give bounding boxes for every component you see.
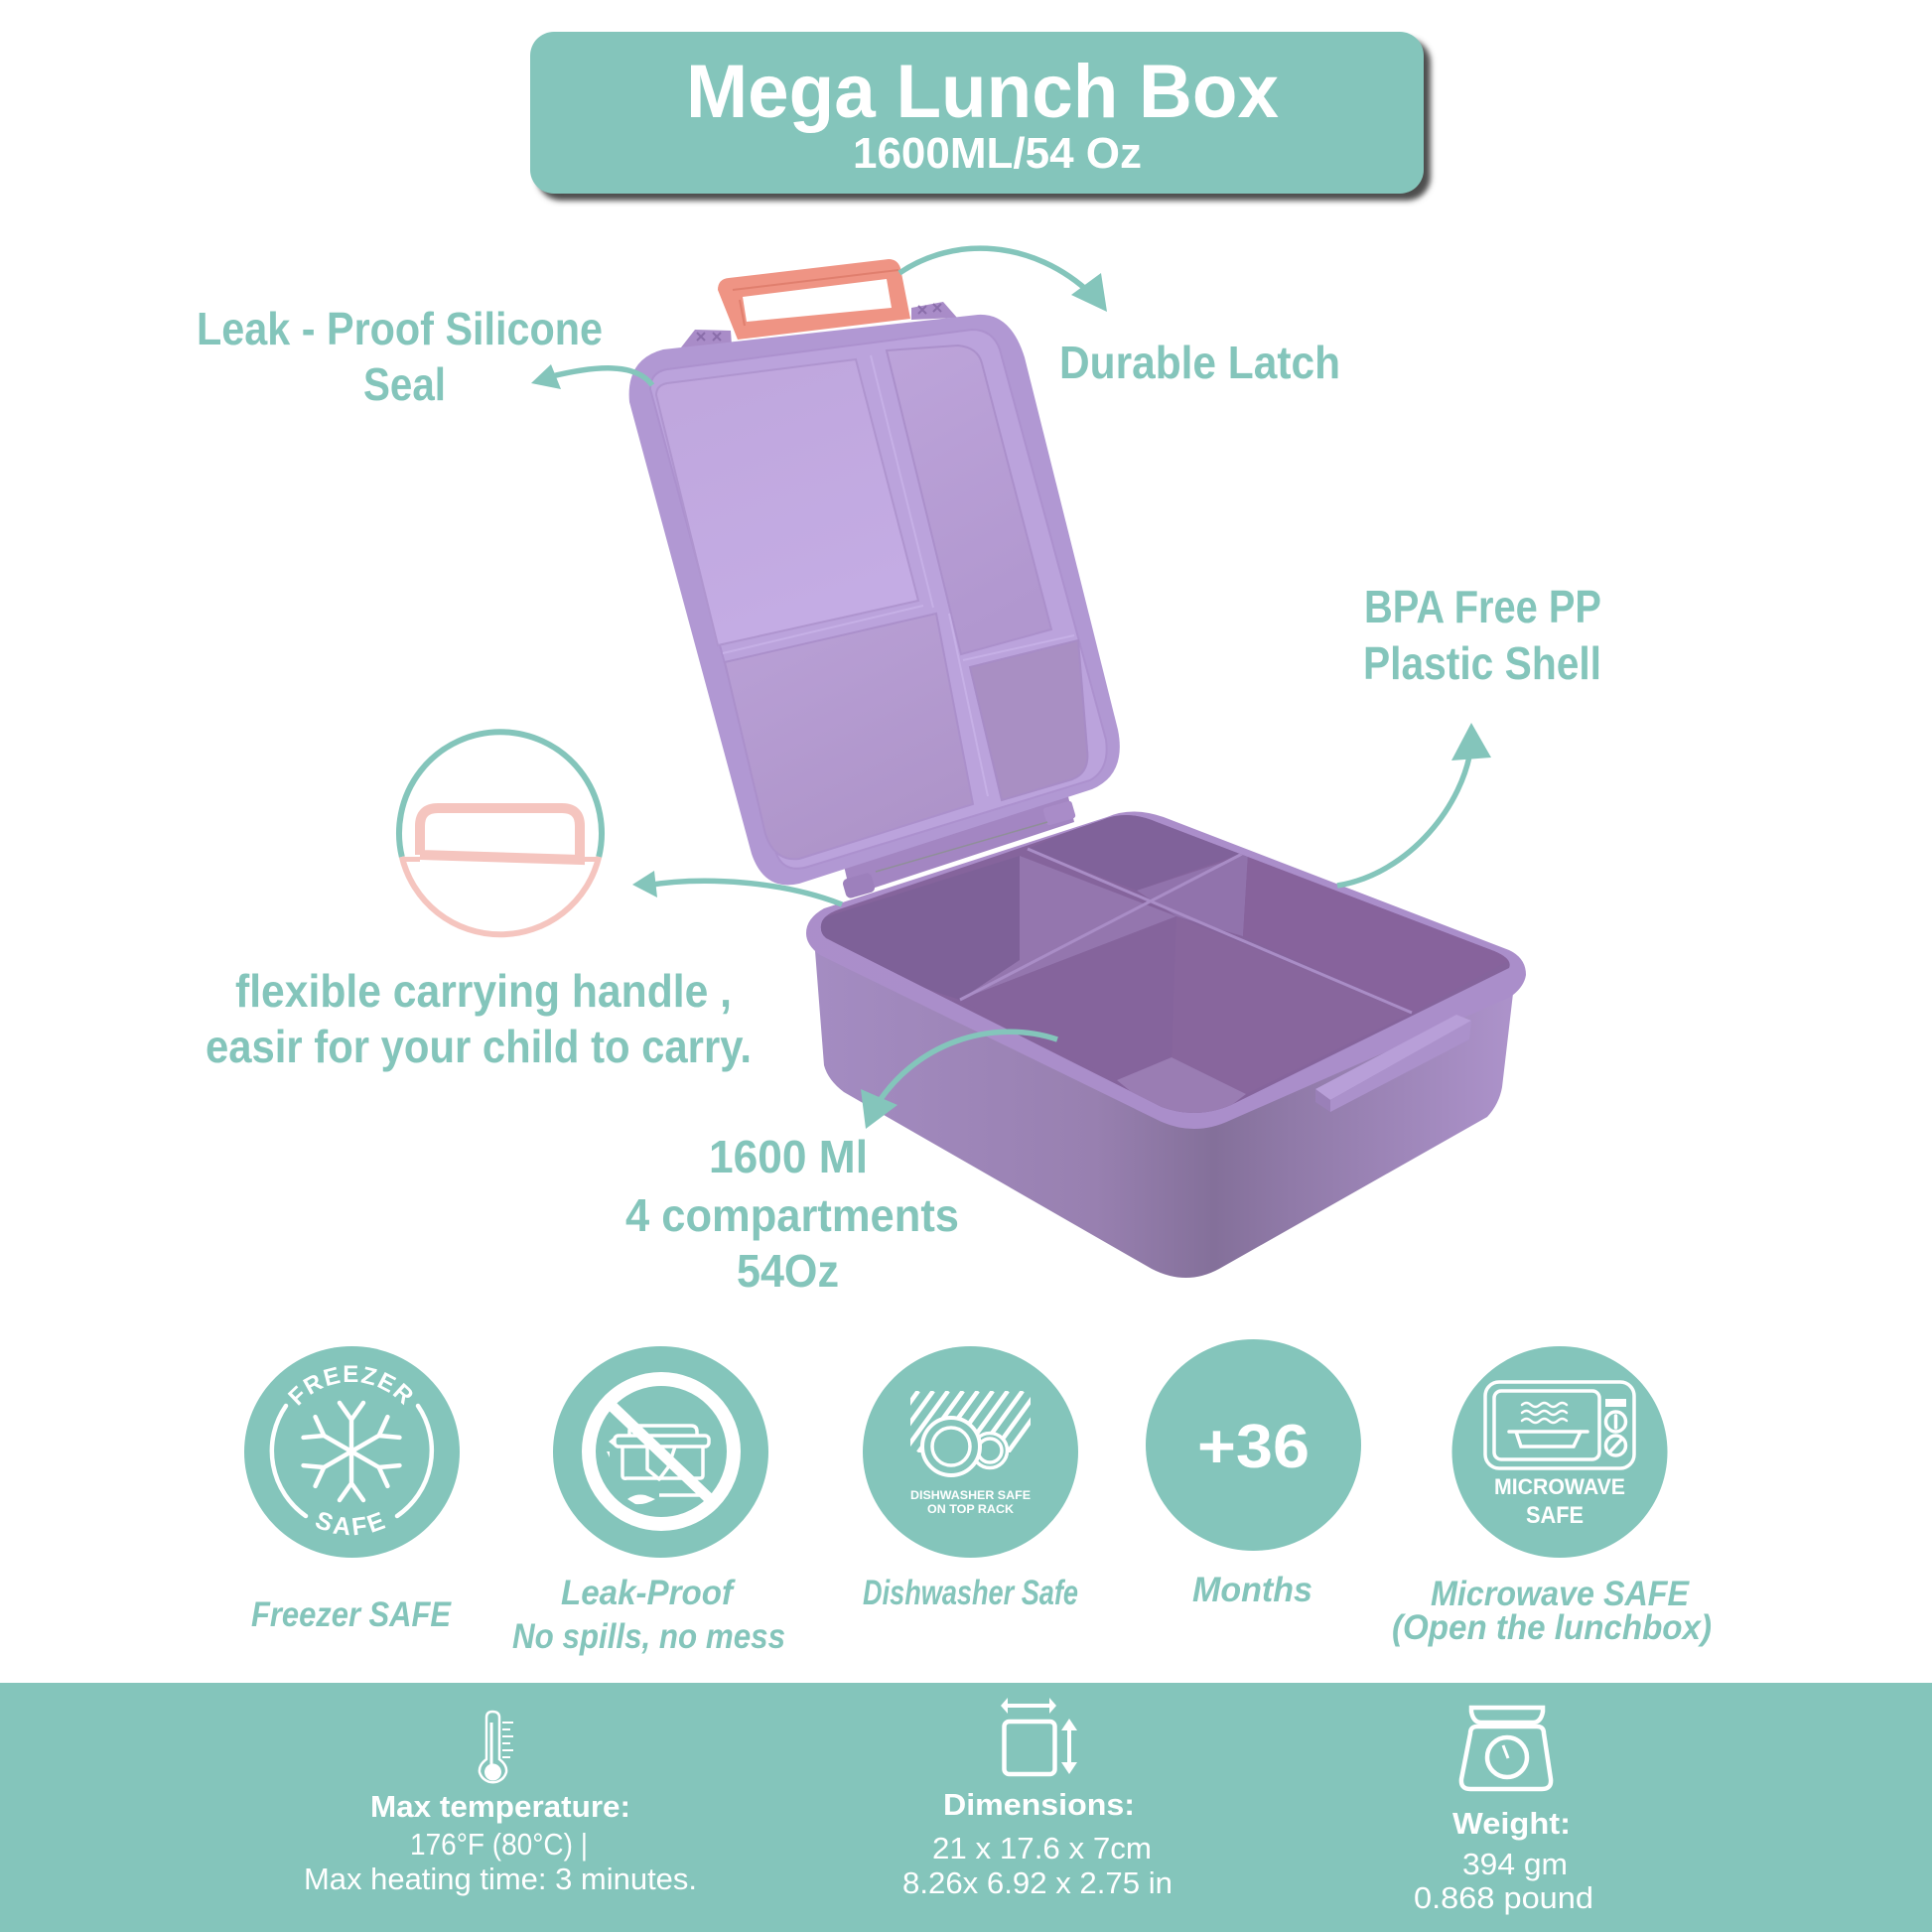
snowflake <box>304 1403 399 1500</box>
hatch <box>910 1391 1031 1452</box>
lid outer shell <box>629 315 1120 885</box>
lid compartment top left <box>656 359 918 645</box>
callout: plastic <box>1363 581 1601 689</box>
label: freezer safe: Freezer SAFE <box>251 1595 452 1634</box>
arrow: BPA shell <box>1337 723 1491 886</box>
callout: capacity: 1600 Ml <box>709 1131 868 1182</box>
dimensions text: 21 x 17.6 x 7cm <box>932 1831 1152 1865</box>
weight text <box>1414 1806 1593 1915</box>
ring arcs <box>272 1406 432 1516</box>
badge: freezer safe: FREEZER <box>288 1366 413 1406</box>
lid compartment bottom left <box>725 614 973 859</box>
label: leak proof: Leak-Proof <box>561 1574 736 1612</box>
callout: seal: Seal <box>363 358 446 410</box>
lid inner rim <box>650 330 1107 869</box>
label: dishwasher safe: Dishwasher Safe <box>863 1574 1078 1612</box>
arrow: handle <box>632 871 842 904</box>
arrow: durable latch <box>899 248 1107 312</box>
dimensions text <box>902 1787 1173 1900</box>
badge: freezer safe <box>244 1346 460 1558</box>
badge: dishwasher safe: DISHWASHER SAFE <box>910 1490 1031 1502</box>
lid compartment bottom right <box>970 640 1087 800</box>
callout: plastic: BPA Free PP <box>1364 581 1601 632</box>
badge: freezer safe: SAFE <box>316 1511 385 1535</box>
temperature text <box>304 1789 697 1896</box>
callout: capacity: 4 compartments <box>625 1189 959 1241</box>
lid divider highlights <box>723 355 1074 796</box>
badge: leak proof <box>553 1346 768 1558</box>
icon: thermometer <box>480 1712 513 1782</box>
lunch box base <box>806 804 1526 1278</box>
callout: handle: flexible carrying handle , <box>235 965 732 1017</box>
callout: handle <box>206 965 752 1072</box>
dimensions text: 8.26x 6.92 x 2.75 in <box>902 1865 1173 1900</box>
badge: microwave safe: SAFE <box>1526 1502 1584 1529</box>
lid hinge <box>842 792 1076 899</box>
callout: plastic: Plastic Shell <box>1363 637 1601 689</box>
temperature text: 176°F (80°C) | <box>410 1827 588 1862</box>
label: microwave safe: Microwave SAFE <box>1431 1575 1691 1613</box>
icon: dimensions <box>1001 1698 1077 1774</box>
label: months: Months <box>1192 1571 1312 1609</box>
box rim <box>806 812 1526 1129</box>
callout: latch: Durable Latch <box>1059 337 1340 388</box>
temperature text: Max heating time: 3 minutes. <box>304 1862 697 1896</box>
badge: microwave safe: MICROWAVE <box>1494 1474 1625 1499</box>
label: microwave safe <box>1392 1575 1712 1647</box>
badge: microwave safe <box>1451 1346 1668 1558</box>
latch tab <box>1315 1015 1471 1112</box>
label: leak proof <box>512 1574 785 1656</box>
label: leak proof: No spills, no mess <box>512 1617 785 1656</box>
callout: seal: Leak - Proof Silicone <box>197 303 603 354</box>
handle latch <box>718 259 910 340</box>
plates <box>922 1418 1007 1475</box>
callout: capacity <box>625 1131 959 1297</box>
arrow: capacity <box>861 1032 1057 1129</box>
icon: kitchen scale <box>1461 1708 1551 1789</box>
icon: handle circle <box>399 732 602 934</box>
callout: capacity: 54Oz <box>737 1245 839 1297</box>
box body <box>814 938 1516 1278</box>
dimensions text: Dimensions: <box>943 1787 1135 1822</box>
weight text: 394 gm <box>1462 1847 1568 1881</box>
icon: leaking box <box>615 1426 709 1495</box>
title banner <box>530 32 1431 201</box>
lunch box lid <box>629 315 1120 885</box>
badge: +36 months: +36 <box>1197 1413 1310 1481</box>
lid compartment top right <box>887 345 1051 654</box>
label: microwave safe: (Open the lunchbox) <box>1392 1608 1712 1647</box>
badge: dishwasher safe <box>863 1346 1078 1558</box>
callout: handle: easir for your child to carry. <box>206 1021 752 1072</box>
weight text: Weight: <box>1452 1806 1571 1841</box>
compartments <box>814 804 1519 1122</box>
weight text: 0.868 pound <box>1414 1880 1593 1915</box>
microwave icon <box>1485 1382 1634 1468</box>
lid hinge lattice <box>681 302 957 347</box>
footer panel <box>0 1683 1932 1932</box>
title: Mega Lunch Box <box>686 50 1279 134</box>
callout: seal <box>197 303 603 410</box>
subtitle: 1600ML/54 Oz <box>853 129 1142 178</box>
arrow: silicone seal <box>531 364 652 389</box>
badge: dishwasher safe: ON TOP RACK <box>927 1504 1015 1516</box>
badge: +36 months <box>1146 1339 1361 1551</box>
temperature text: Max temperature: <box>370 1789 630 1824</box>
